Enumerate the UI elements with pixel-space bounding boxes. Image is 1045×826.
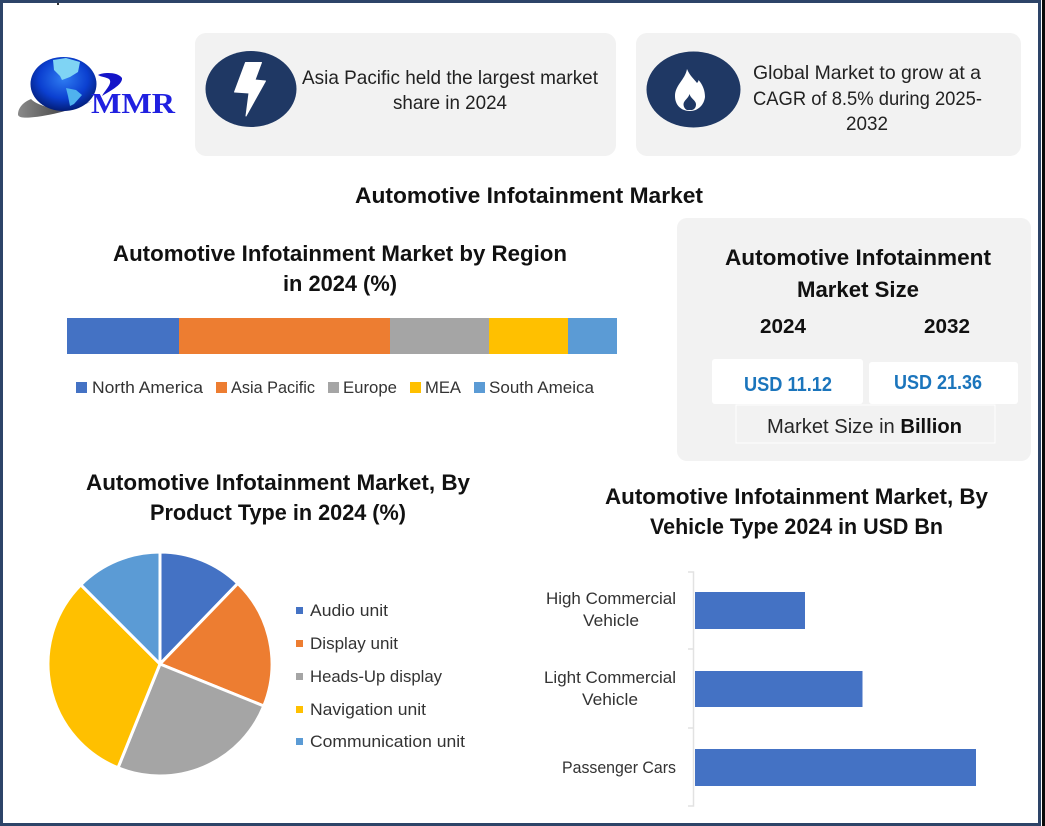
year 2032: 2032 bbox=[924, 316, 970, 338]
value box 2024 bbox=[712, 359, 863, 404]
bar chart: vehicle type: Vehicle bbox=[583, 612, 639, 630]
legend: region: MEA bbox=[425, 379, 461, 397]
logo: MMR globe bbox=[18, 57, 176, 120]
value box 2032: USD 21.36 bbox=[894, 372, 982, 394]
unit note: Market Size in Billion bbox=[767, 416, 962, 438]
callout text bbox=[753, 62, 982, 135]
bar chart: vehicle type: Passenger Cars bbox=[562, 759, 676, 777]
legend: region: North America bbox=[92, 379, 204, 397]
legend: product type: Navigation unit bbox=[310, 701, 426, 719]
icon: flame bbox=[646, 52, 740, 128]
legend: product type bbox=[296, 602, 465, 751]
callout text: share in 2024 bbox=[393, 92, 507, 114]
panel heading bbox=[725, 245, 992, 302]
callout text: Asia Pacific held the largest market bbox=[302, 67, 599, 89]
legend: region: Asia Pacific bbox=[231, 379, 315, 397]
unit note bbox=[736, 405, 995, 443]
legend: product type: Heads-Up display bbox=[310, 668, 443, 686]
heading: by vehicle type: Vehicle Type 2024 in USD Bn bbox=[650, 514, 943, 539]
title: Automotive Infotainment Market bbox=[355, 183, 704, 208]
panel heading: Automotive Infotainment bbox=[725, 245, 992, 270]
bar chart: vehicle type: High Commercial bbox=[546, 590, 676, 608]
heading: by region: Automotive Infotainment Market by Region bbox=[113, 241, 567, 266]
heading: by product type: Automotive Infotainment Market, By bbox=[86, 470, 471, 495]
stacked bar chart: region bbox=[67, 318, 617, 354]
heading: by region bbox=[113, 241, 567, 296]
heading: by product type bbox=[86, 470, 471, 525]
pie chart: product type bbox=[48, 552, 272, 776]
panel heading: Market Size bbox=[797, 277, 919, 302]
icon: lightning bolt bbox=[206, 51, 296, 127]
panel: market size bbox=[677, 218, 1031, 461]
legend: product type: Communication unit bbox=[310, 733, 465, 751]
value box 2024: USD 11.12 bbox=[744, 374, 832, 396]
legend: region: South Ameica bbox=[489, 379, 595, 397]
value box 2032 bbox=[869, 362, 1018, 404]
heading: by vehicle type bbox=[605, 484, 989, 539]
heading: by product type: Product Type in 2024 (%) bbox=[150, 500, 406, 525]
callout: Asia Pacific share bbox=[195, 33, 616, 156]
heading: by vehicle type: Automotive Infotainment Market, By bbox=[605, 484, 989, 509]
callout text bbox=[302, 67, 599, 114]
callout text: Global Market to grow at a bbox=[753, 62, 981, 84]
callout text: 2032 bbox=[846, 113, 888, 135]
legend: region bbox=[76, 379, 595, 397]
bar chart: vehicle type: Vehicle bbox=[582, 691, 638, 709]
legend: region: Europe bbox=[343, 379, 397, 397]
bar chart: vehicle type: Light Commercial bbox=[544, 669, 676, 687]
callout text: CAGR of 8.5% during 2025- bbox=[753, 88, 982, 110]
legend: product type: Audio unit bbox=[310, 602, 388, 620]
heading: by region: in 2024 (%) bbox=[283, 271, 397, 296]
logo: MMR globe: MMR bbox=[91, 89, 176, 120]
bar chart: vehicle type bbox=[544, 572, 976, 806]
legend: product type: Display unit bbox=[310, 635, 398, 653]
callout: CAGR bbox=[636, 33, 1021, 156]
year 2024: 2024 bbox=[760, 316, 807, 338]
